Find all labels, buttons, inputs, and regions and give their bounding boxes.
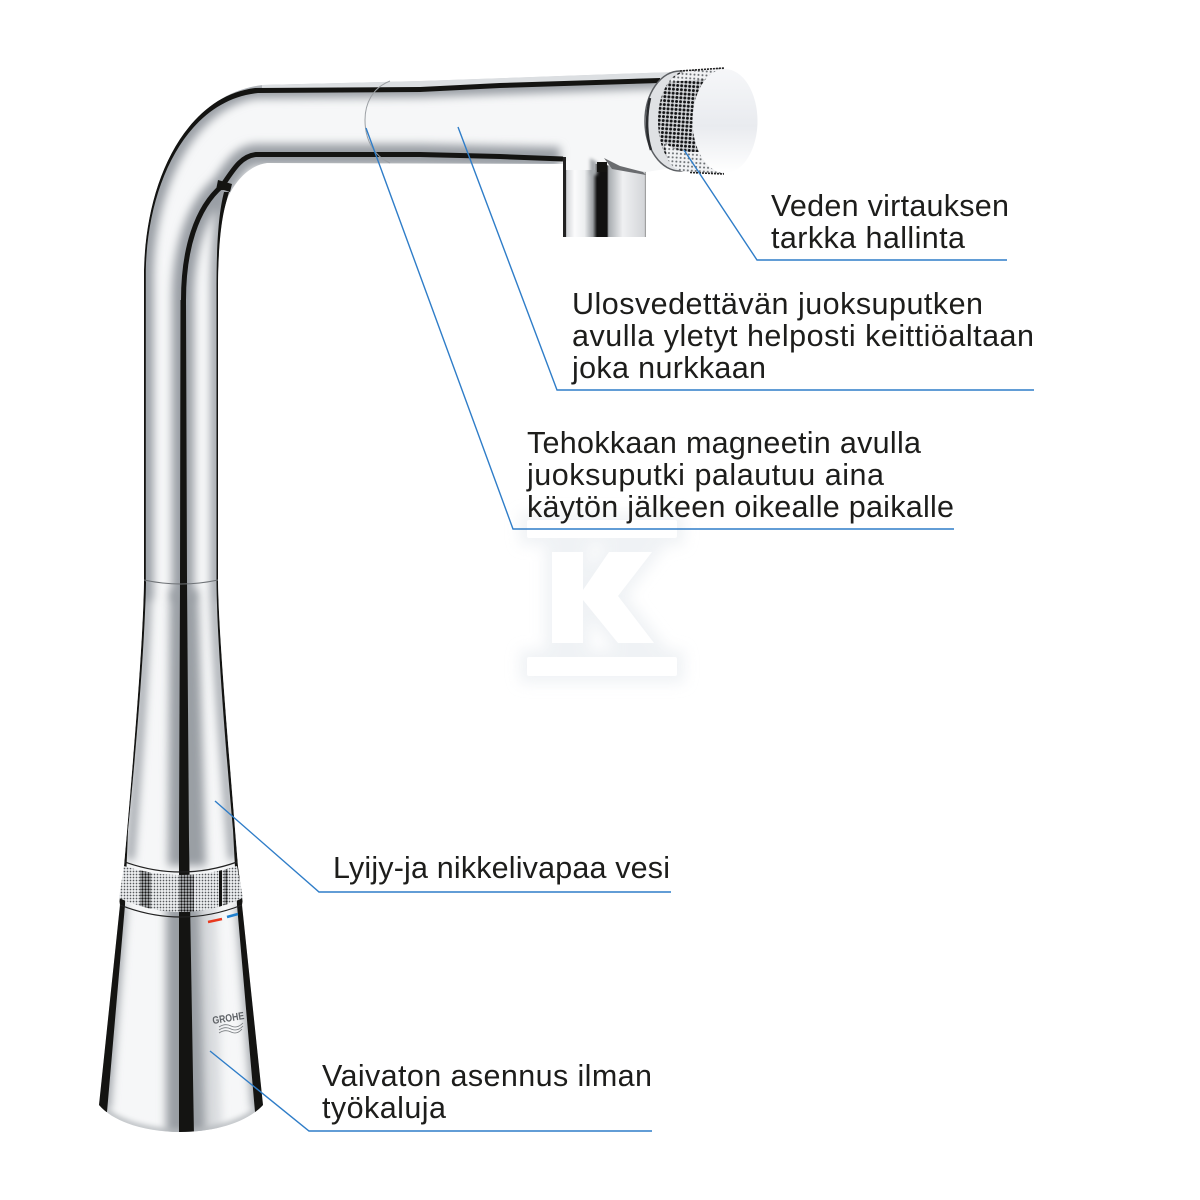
- GROHE logo: [212, 1010, 245, 1033]
- bottom rim shading: [104, 1108, 260, 1132]
- callout: magnet: [366, 128, 954, 529]
- pull-out nozzle outlet: [563, 150, 646, 237]
- control knob: [645, 68, 758, 174]
- callout: water flow control: tarkka hallinta: [771, 221, 965, 255]
- black reflections: [97, 78, 660, 1136]
- nozzle junction: [563, 157, 646, 237]
- callout: easy installation: työkaluja: [322, 1091, 446, 1125]
- GROHE logo: GROHE: [212, 1010, 245, 1027]
- faucet body with chrome reflections: [90, 60, 690, 1140]
- callout: magnet: juoksuputki palautuu aina: [526, 458, 884, 492]
- callout: pull-out spout: joka nurkkaan: [571, 351, 766, 385]
- watermark logo: [527, 520, 677, 676]
- callout: magnet: Tehokkaan magneetin avulla: [527, 426, 921, 460]
- joint seam: [144, 580, 218, 584]
- callout: easy installation: [210, 1051, 652, 1131]
- callout: lead and nickel free: Lyijy-ja nikkelivapaa vesi: [333, 851, 670, 885]
- chrome ring: [645, 71, 715, 171]
- callout: easy installation: Vaivaton asennus ilman: [322, 1059, 652, 1093]
- callout: pull-out spout: Ulosvedettävän juoksuputken: [572, 287, 983, 321]
- soft grey reflections: [130, 81, 660, 860]
- callout: water flow control: [684, 150, 1009, 260]
- callout: lead and nickel free: [215, 801, 671, 892]
- light fringe above top band: [262, 72, 670, 88]
- callout: water flow control: Veden virtauksen: [771, 189, 1009, 223]
- spout seam: [365, 81, 390, 163]
- knurled collar: [119, 860, 243, 920]
- knurled grip: [658, 68, 724, 174]
- callout: magnet: käytön jälkeen oikealle paikalle: [527, 490, 954, 524]
- hot and cold markers: [208, 914, 238, 922]
- callout: pull-out spout: avulla yletyt helposti keittiöaltaan: [572, 319, 1034, 353]
- faucet: [90, 60, 758, 1140]
- callout: pull-out spout: [458, 127, 1034, 390]
- knob face: [692, 69, 758, 173]
